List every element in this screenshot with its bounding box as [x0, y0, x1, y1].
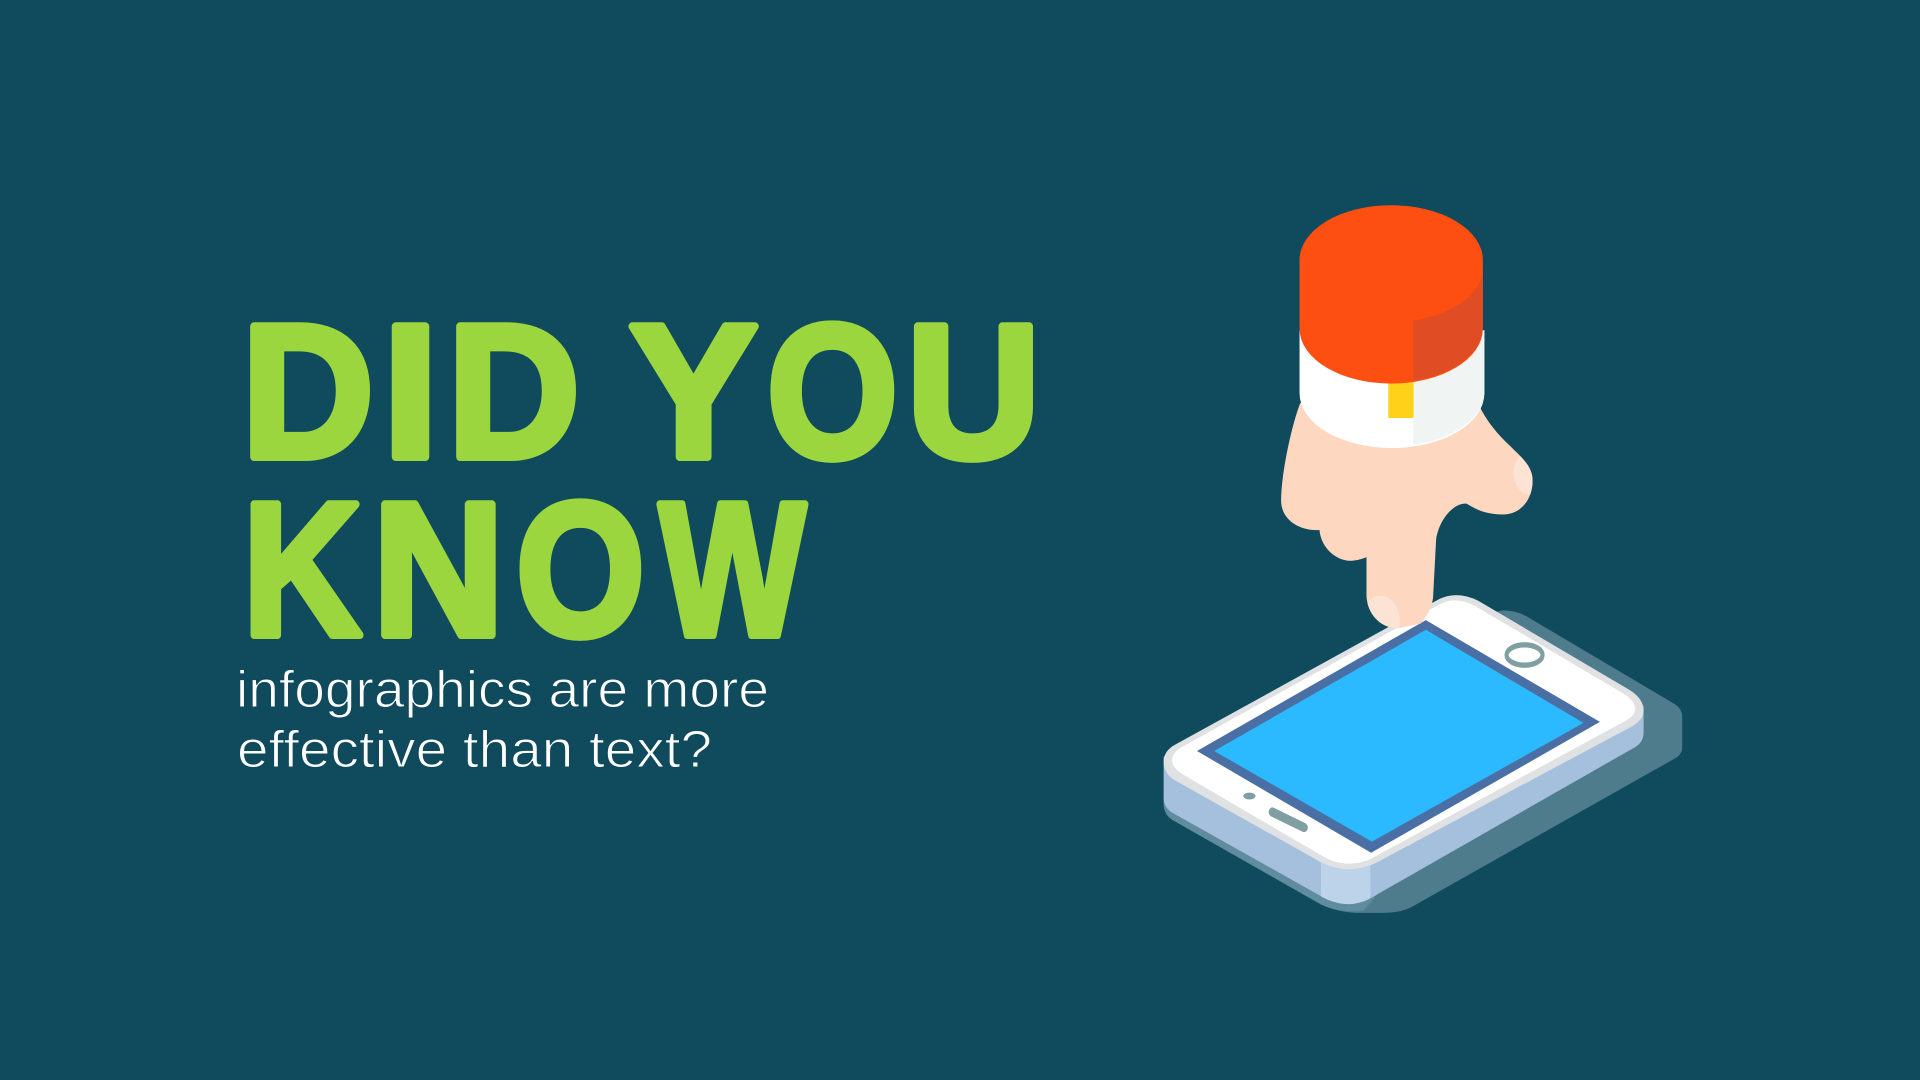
phone shadow, left strip [1164, 796, 1375, 911]
title line 1: U [907, 286, 1040, 498]
screen frame [1197, 620, 1600, 853]
cuff [1300, 330, 1484, 448]
subtitle line 2: effective than text? [237, 721, 712, 779]
speaker [1272, 812, 1304, 828]
title line 2: O [516, 464, 645, 676]
title line 1: O [767, 286, 898, 498]
phone shadow [1164, 610, 1682, 913]
phone face [1172, 600, 1635, 864]
title line 1: I [382, 286, 438, 498]
fingertip highlight: thumb [1514, 456, 1532, 495]
subtitle line 1: infographics are more [236, 661, 769, 719]
subtitle [236, 661, 769, 779]
phone body side [1164, 616, 1644, 903]
title line 1: D [242, 286, 374, 498]
hand [1281, 403, 1533, 628]
camera [1243, 793, 1256, 799]
sleeve [1300, 205, 1483, 384]
title line 2: K [243, 464, 362, 676]
title line 2: N [373, 464, 504, 676]
fingertip highlight: pointer [1368, 596, 1400, 628]
screen [1214, 630, 1583, 842]
title line 1: D [448, 286, 580, 498]
home button [1507, 645, 1543, 665]
cuff shade [1413, 330, 1484, 445]
title line 2: W [660, 464, 806, 676]
title: did you know [242, 286, 1040, 676]
phone corner highlight [1321, 859, 1370, 904]
title line 1: Y [629, 286, 758, 498]
phone face rim [1164, 595, 1644, 869]
illustration: hand tapping phone [1164, 205, 1682, 913]
sleeve shade [1413, 272, 1483, 381]
cuff button [1388, 381, 1414, 418]
